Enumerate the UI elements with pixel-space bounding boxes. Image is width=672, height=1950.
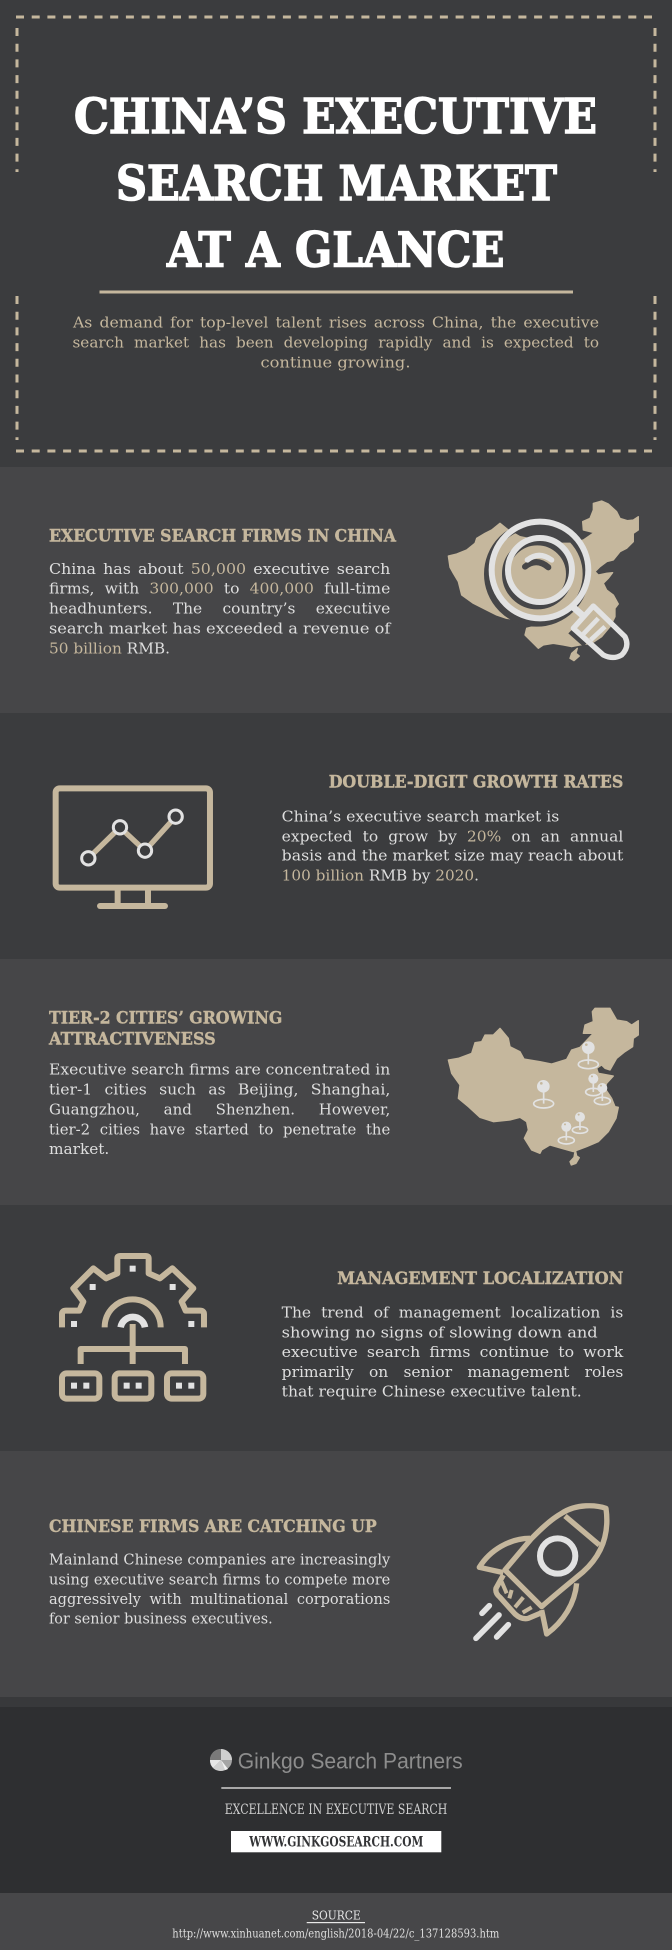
icon: China map with magnifying glass xyxy=(448,501,638,661)
icon: gear with org chart xyxy=(62,1256,204,1399)
body text xyxy=(49,1550,391,1628)
body text: basis and the market size may reach about xyxy=(282,847,623,865)
icon: China map with location pins xyxy=(448,1008,638,1165)
body text: executive search firms continue to work xyxy=(282,1343,624,1361)
title: SEARCH MARKET xyxy=(116,156,557,212)
panel: footer xyxy=(0,1697,672,1893)
body text: China’s executive search market is xyxy=(282,807,559,825)
body text: using executive search firms to compete more xyxy=(49,1570,390,1588)
source URL: http://www.xinhuanet.com/english/2018-04/22/c_137128593.htm xyxy=(172,1926,500,1940)
body text: search market has exceeded a revenue of xyxy=(49,619,392,637)
body text xyxy=(49,560,392,657)
body text: that require Chinese executive talent. xyxy=(282,1383,582,1401)
heading xyxy=(48,1008,282,1049)
body text: firms, with 300,000 to 400,000 full-time xyxy=(49,580,390,598)
body text: for senior business executives. xyxy=(49,1610,273,1628)
body text: aggressively with multinational corporations xyxy=(49,1590,390,1608)
body text xyxy=(49,1061,391,1158)
title: AT A GLANCE xyxy=(166,223,504,279)
panel: management localization xyxy=(0,1205,672,1451)
brand name: Ginkgo Search Partners xyxy=(238,1749,463,1774)
heading: DOUBLE-DIGIT GROWTH RATES xyxy=(329,772,623,791)
body text: 100 billion RMB by 2020. xyxy=(282,867,479,885)
website button xyxy=(231,1831,441,1852)
website button: WWW.GINKGOSEARCH.COM xyxy=(249,1835,423,1851)
panel: source xyxy=(0,1893,672,1950)
intro text: As demand for top-level talent rises across China, the executive xyxy=(72,316,599,332)
heading: CHINESE FIRMS ARE CATCHING UP xyxy=(49,1517,377,1536)
panel: tier-2 cities xyxy=(0,959,672,1205)
body text: tier-2 cities have started to penetrate the xyxy=(49,1120,390,1138)
intro text: search market has been developing rapidly and is expected to xyxy=(72,336,599,352)
body text: China has about 50,000 executive search xyxy=(49,560,391,578)
intro text: continue growing. xyxy=(260,356,410,372)
heading: MANAGEMENT LOCALIZATION xyxy=(337,1269,623,1288)
body text: The trend of management localization is xyxy=(282,1304,623,1322)
body text: headhunters. The country’s executive xyxy=(49,600,390,618)
panel: double-digit growth xyxy=(0,713,672,959)
panel: header xyxy=(0,0,672,467)
body text: expected to grow by 20% on an annual xyxy=(282,827,624,845)
body text: showing no signs of slowing down and xyxy=(282,1323,598,1341)
intro text xyxy=(72,316,599,372)
body text: primarily on senior management roles xyxy=(282,1363,623,1381)
icon: Ginkgo logo xyxy=(210,1749,232,1771)
title xyxy=(74,89,597,279)
body text xyxy=(282,1304,624,1401)
title: CHINA’S EXECUTIVE xyxy=(74,89,597,145)
body text: Mainland Chinese companies are increasingly xyxy=(49,1550,391,1568)
body text: Guangzhou, and Shenzhen. However, xyxy=(49,1100,390,1118)
heading: ATTRACTIVENESS xyxy=(48,1030,216,1049)
panel: executive search firms xyxy=(0,467,672,713)
body text: tier-1 cities such as Beijing, Shanghai, xyxy=(49,1081,390,1099)
icon: monitor with line chart xyxy=(56,788,210,906)
heading: TIER-2 CITIES’ GROWING xyxy=(49,1008,282,1027)
body text xyxy=(282,807,624,885)
tagline: EXCELLENCE IN EXECUTIVE SEARCH xyxy=(225,1802,447,1818)
body text: market. xyxy=(49,1140,109,1158)
body text: 50 billion RMB. xyxy=(49,639,170,657)
panel: Chinese firms catching up xyxy=(0,1451,672,1697)
source label: SOURCE xyxy=(312,1907,361,1922)
icon: rocket xyxy=(476,1506,607,1638)
body text: Executive search firms are concentrated in xyxy=(49,1061,391,1079)
heading: EXECUTIVE SEARCH FIRMS IN CHINA xyxy=(49,526,396,545)
